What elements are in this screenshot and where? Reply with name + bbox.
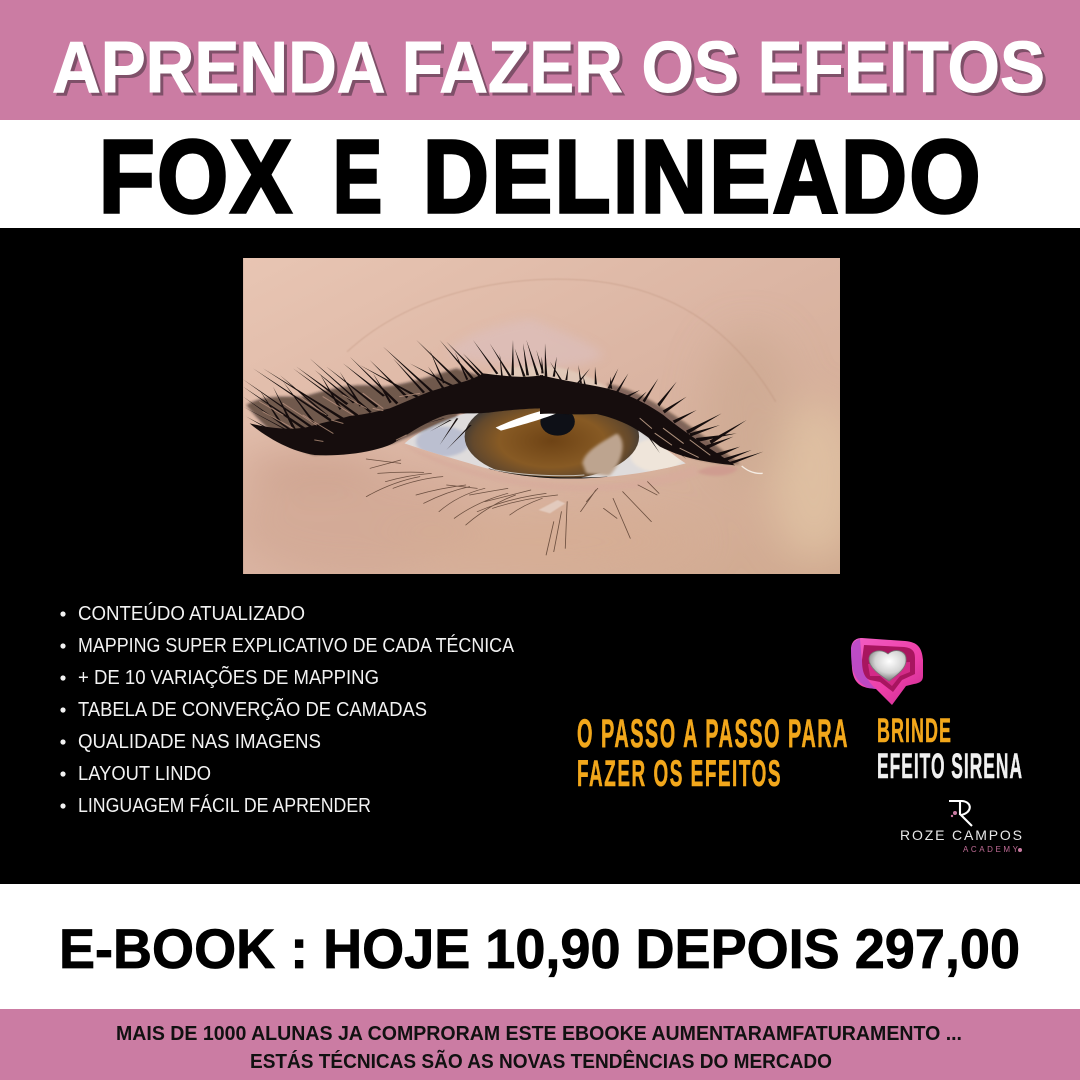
wing haze (246, 368, 483, 455)
orange callout: passo a passo (577, 712, 849, 794)
logo mark: R monogram (949, 801, 972, 826)
corner haze (607, 383, 740, 464)
wing skin gaps (260, 393, 420, 441)
social proof text: ESTÁS TÉCNICAS SÃO AS NOVAS TENDÊNCIAS DO MERCADO (250, 1049, 832, 1073)
headline: fox e delineado: DELINEADO (423, 119, 983, 234)
inner corner (697, 466, 737, 476)
bullet item 3: + DE 10 VARIAÇÕES DE MAPPING (78, 665, 379, 689)
photo: eye with fox lashes (229, 258, 856, 578)
top banner (0, 0, 1080, 120)
logo: roze campos academy: ROZE CAMPOS (900, 827, 1022, 843)
corner skin gaps (640, 418, 710, 457)
headline: fox e delineado (99, 119, 983, 234)
bullet item 2: MAPPING SUPER EXPLICATIVO DE CADA TÉCNICA (78, 634, 515, 657)
headline band (0, 119, 1080, 234)
icon: silver heart (869, 651, 906, 681)
feature list (60, 602, 515, 817)
eye white and iris (404, 408, 686, 479)
orange callout: passo a passo: FAZER OS EFEITOS (577, 753, 782, 794)
tear line highlight (742, 466, 763, 473)
social proof text: MAIS DE 1000 ALUNAS JA COMPRORAM ESTE EBOOKE AUMENTARAMFATURAMENTO ... (116, 1023, 962, 1045)
bottom banner (0, 1009, 1080, 1080)
lower lid rim (401, 443, 699, 491)
black content panel (0, 228, 1080, 884)
upper lashes: outer wing (243, 340, 543, 455)
lower lashes (366, 459, 659, 555)
logo: roze campos academy (900, 801, 1022, 854)
eyelid crease (347, 279, 776, 402)
lower lid sparkle (538, 500, 565, 513)
headline: fox e delineado: FOX (99, 119, 294, 234)
headline: fox e delineado: E (333, 119, 382, 234)
gift label: brinde efeito sirena: BRINDE (877, 712, 952, 750)
icon: heart speech bubble (851, 638, 923, 705)
bullet item 7: LINGUAGEM FÁCIL DE APRENDER (78, 794, 371, 817)
upper lashes: outer corner (540, 343, 763, 473)
price line: E-BOOK : HOJE 10,90 DEPOIS 297,00 (59, 917, 1020, 980)
logo: roze campos academy: ACADEMY (963, 845, 1019, 854)
price band (0, 884, 1080, 1009)
gift label: brinde efeito sirena (877, 712, 1023, 786)
social proof text (116, 1023, 962, 1073)
bullet item 1: CONTEÚDO ATUALIZADO (78, 602, 305, 625)
bullet item 6: LAYOUT LINDO (78, 763, 211, 785)
bullet item 5: QUALIDADE NAS IMAGENS (78, 731, 321, 753)
bullet item 4: TABELA DE CONVERÇÃO DE CAMADAS (78, 697, 427, 721)
